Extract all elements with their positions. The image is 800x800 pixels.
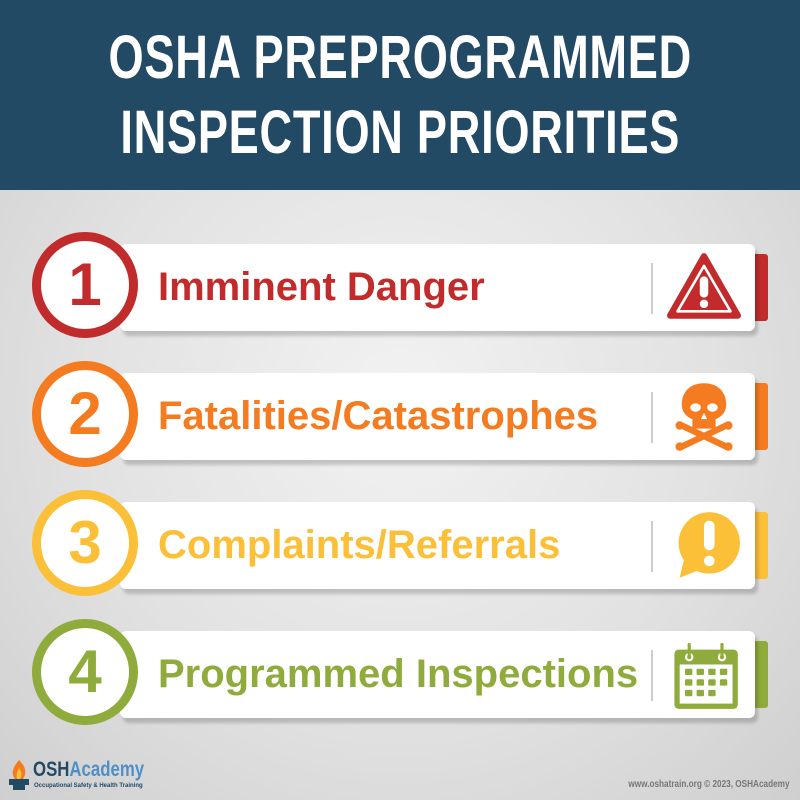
- label: Complaints/Referrals: [158, 523, 560, 567]
- number circle 1: [32, 232, 138, 338]
- number circle 1: 1: [68, 251, 102, 318]
- row 4: programmed inspections: [32, 619, 768, 725]
- card: [120, 244, 755, 331]
- tab: [755, 254, 768, 321]
- number circle 3: 3: [68, 509, 102, 576]
- card: [120, 631, 755, 718]
- icon: torch: [9, 760, 29, 790]
- number circle 2: 2: [68, 380, 102, 447]
- label: Programmed Inspections: [158, 652, 638, 696]
- number circle 3: [32, 490, 138, 596]
- card: [120, 502, 755, 589]
- logo: OSHAcademy: OSHAcademy: [33, 758, 144, 781]
- icon: warning triangle: [667, 253, 741, 319]
- row 1: imminent danger: [32, 232, 768, 338]
- number circle 4: [32, 619, 138, 725]
- row 2: fatalities: [32, 361, 768, 467]
- icon: calendar: [674, 642, 738, 709]
- tab: [755, 383, 768, 450]
- footer credit: www.oshatrain.org © 2023, OSHAcademy: [629, 779, 790, 790]
- number circle 4: 4: [68, 638, 102, 705]
- title line 2: INSPECTION PRIORITIES: [120, 98, 680, 166]
- row 3: complaints: [32, 490, 768, 596]
- logo: OSHAcademy: [9, 758, 144, 790]
- header: [0, 0, 800, 190]
- number circle 2: [32, 361, 138, 467]
- title line 1: OSHA PREPROGRAMMED: [108, 23, 692, 91]
- icon: exclamation speech bubble: [678, 512, 740, 578]
- tab: [755, 512, 768, 579]
- tab: [755, 641, 768, 708]
- card: [120, 373, 755, 460]
- logo: OSHAcademy: Occupational Safety & Health Training: [34, 783, 143, 789]
- label: Imminent Danger: [158, 265, 485, 309]
- label: Fatalities/Catastrophes: [158, 394, 598, 438]
- icon: skull and crossbones: [675, 383, 733, 451]
